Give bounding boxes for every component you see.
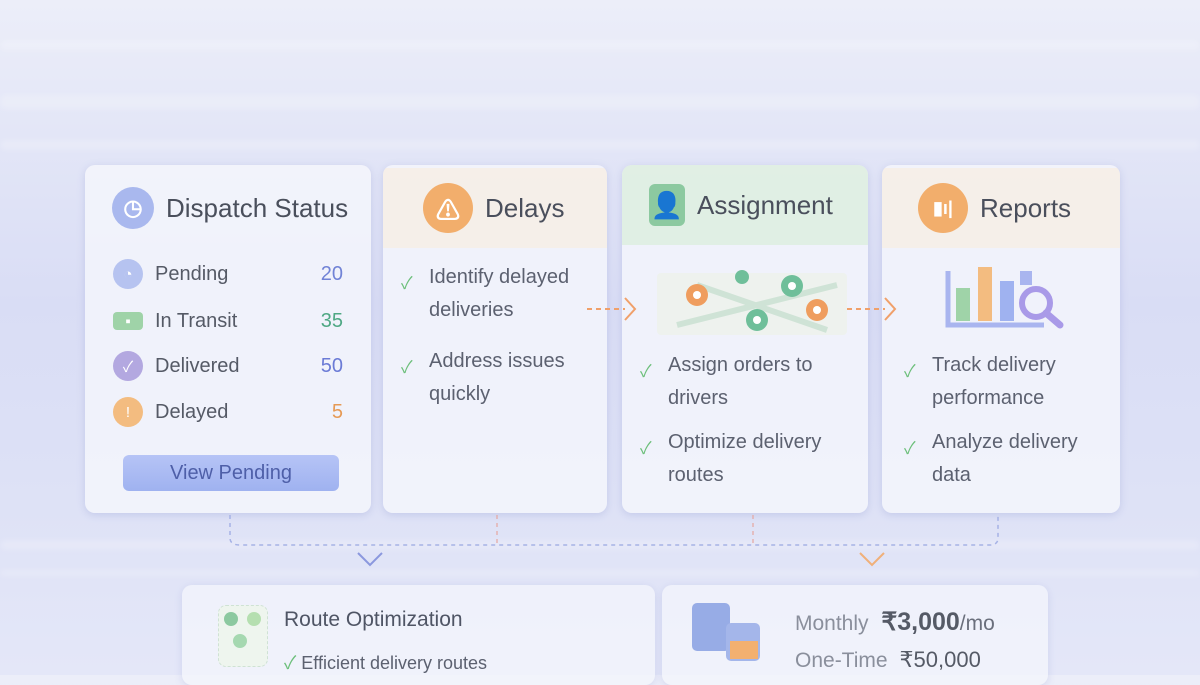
heading: dispatch status: Dispatch Status <box>166 192 348 222</box>
panel: delays: deliveries <box>429 299 513 321</box>
row: delivered <box>113 351 343 381</box>
panel: reports: data <box>932 464 971 486</box>
heading: dispatch status: ◷ <box>123 195 143 220</box>
panel: assignment: drivers <box>668 387 728 409</box>
icon: truck <box>692 603 760 661</box>
panel: assignment: routes <box>668 464 724 486</box>
row: delayed: 5 <box>332 400 343 422</box>
panel: delays <box>383 165 607 513</box>
panel: reports: ✓ <box>904 362 916 381</box>
heading: delays <box>383 168 607 248</box>
panel: assignment: ✓ <box>640 439 652 458</box>
chart icon <box>946 267 1064 328</box>
panel: delays: quickly <box>429 383 490 405</box>
row: delivered: 50 <box>321 354 343 376</box>
panel: reports: Analyze delivery <box>932 431 1078 453</box>
row: delivered: Delivered <box>155 354 239 376</box>
row: in transit: In Transit <box>155 310 237 332</box>
map illustration <box>657 270 847 335</box>
panel: delays: Address issues <box>429 350 565 372</box>
row: pending: ◔ <box>123 266 133 282</box>
row: pending <box>113 259 343 289</box>
heading: reports: Reports <box>980 192 1071 222</box>
row: delayed: ! <box>126 404 130 420</box>
heading: route optimization: Route Optimization <box>284 608 463 631</box>
row: in transit <box>113 310 343 332</box>
list: reports <box>904 354 1078 486</box>
row: in transit: 35 <box>321 310 343 332</box>
row: delayed: Delayed <box>155 400 228 422</box>
heading: dispatch status <box>112 187 348 229</box>
list: delays <box>401 266 569 405</box>
panel: assignment: Optimize delivery <box>668 431 821 453</box>
button: view pending: View Pending <box>170 462 292 484</box>
panel: dispatch status <box>85 165 371 513</box>
heading: reports <box>882 168 1120 248</box>
row: delayed <box>113 397 343 427</box>
panel: reports: ✓ <box>904 439 916 458</box>
panel: reports: Track delivery <box>932 354 1056 376</box>
connector lines to bottom <box>229 515 999 566</box>
heading: assignment: 👤 <box>651 190 683 220</box>
panel: delays: ✓ <box>401 358 413 377</box>
panel: assignment: ✓ <box>640 362 652 381</box>
row: in transit: ▪ <box>125 312 131 330</box>
text: monthly price: Monthly ₹3,000/mo <box>795 608 995 636</box>
heading: assignment: Assignment <box>697 190 833 220</box>
panel: assignment <box>622 165 868 513</box>
panel: delays: Identify delayed <box>429 266 569 288</box>
row: pending: 20 <box>321 262 343 284</box>
arrow: delays to assignment <box>587 297 636 321</box>
heading: assignment <box>622 165 868 245</box>
panel: reports: performance <box>932 387 1044 409</box>
icon: route <box>218 605 268 667</box>
heading: delays: Delays <box>485 192 564 222</box>
heading: delays: ⚠ <box>436 198 460 224</box>
arrow: assignment to reports <box>847 297 896 321</box>
panel: assignment: Assign orders to <box>668 354 813 376</box>
text: one-time price: One-Time ₹50,000 <box>795 647 981 672</box>
heading: reports: ▮ı| <box>933 198 953 218</box>
panel: delays: ✓ <box>401 274 413 293</box>
row: pending: Pending <box>155 262 228 284</box>
row: delivered: ✓ <box>123 358 133 376</box>
text: efficient routes: ✓ Efficient delivery routes <box>284 653 487 673</box>
button: view pending <box>123 455 339 491</box>
panel: reports <box>882 165 1120 513</box>
panel: pricing <box>662 585 1048 685</box>
panel: route optimization <box>182 585 655 685</box>
list: assignment <box>640 354 822 486</box>
